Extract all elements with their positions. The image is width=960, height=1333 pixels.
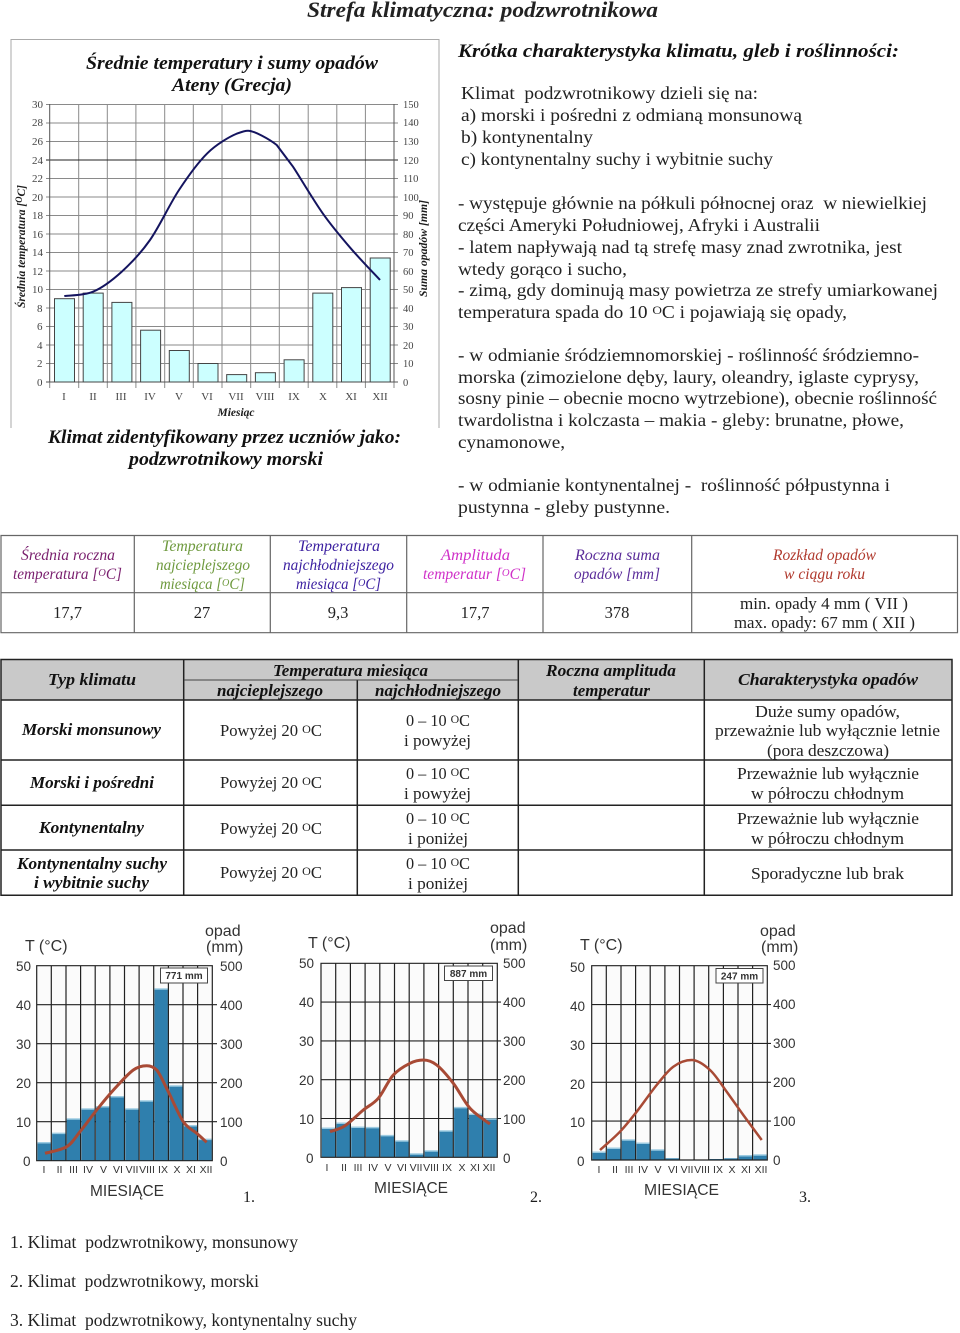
precipitation axis labels: 0 (773, 1153, 781, 1168)
precipitation axis labels: 100 (503, 1112, 526, 1127)
left axis title: O (14, 196, 24, 203)
temperature axis labels: 10 (16, 1115, 31, 1130)
temperature axis labels: 40 (299, 995, 314, 1010)
climate chart 3 (570, 923, 811, 1206)
warmest month column: O (302, 864, 311, 878)
precipitation axis labels: opad (490, 920, 526, 937)
right axis labels: 120 (403, 156, 419, 167)
table header background (1, 660, 952, 700)
warmest month column: Powyżej 20 (220, 863, 297, 882)
coldest month column: i powyżej (404, 784, 471, 803)
right axis labels: 70 (403, 248, 414, 259)
coldest month column: O (451, 810, 459, 824)
month labels: I (326, 1162, 328, 1174)
temperature axis labels: 0 (577, 1154, 585, 1169)
warmest month column: C (311, 863, 322, 882)
month labels (598, 1164, 767, 1176)
header: warmest month: Temperatura (162, 538, 243, 555)
precipitation min and max: max. opady: 67 mm ( XII ) (734, 613, 915, 632)
temperature axis labels (570, 937, 623, 1169)
annual total box: 771 mm (165, 971, 203, 982)
temperature axis labels (299, 935, 351, 1166)
precipitation axis labels (490, 920, 527, 1166)
temperature axis labels: 0 (23, 1154, 31, 1169)
month labels: VII (228, 391, 244, 403)
text block: continental variant: - w odmianie kontynentalnej - roślinność półpustynna i (458, 475, 890, 495)
heading: climate description: Krótka charakterystyka klimatu, gleb i roślinności: (457, 41, 899, 62)
left axis labels: 4 (37, 340, 43, 352)
header cells: najchłodniejszego (375, 681, 501, 700)
coldest month column: O (451, 855, 459, 869)
month labels: IV (638, 1164, 648, 1176)
month labels: VI (397, 1162, 407, 1174)
header: amplitude (423, 547, 526, 583)
left axis labels: 16 (32, 229, 44, 241)
month labels: I (43, 1164, 45, 1176)
annual total box: 887 mm (450, 969, 487, 980)
chart number: 3. (799, 1189, 811, 1206)
right axis labels: 80 (403, 230, 414, 241)
text block: occurrence and seasons: C i pojawiają się opady, (662, 302, 847, 322)
month labels: IV (368, 1162, 378, 1174)
header: coldest month: miesiąca [ (296, 576, 363, 593)
precipitation min and max (734, 594, 915, 632)
climate chart 2 (299, 920, 542, 1206)
precipitation axis labels: 500 (773, 958, 796, 973)
month labels: V (175, 391, 183, 403)
precipitation axis labels (205, 923, 243, 1169)
month labels: V (384, 1162, 392, 1174)
precipitation axis labels: 500 (503, 956, 526, 971)
coldest month column: C (459, 764, 470, 783)
right axis labels: 20 (403, 341, 414, 352)
climate type names: Kontynentalny (38, 818, 145, 837)
text block: climate subdivisions: a) morski i pośredni z odmianą monsunową (461, 105, 802, 125)
table: Athens climate data (1, 536, 958, 633)
climate type names: Kontynentalny suchy (16, 854, 168, 873)
text block: Mediterranean variant (458, 345, 937, 452)
right axis labels: 150 (403, 100, 419, 111)
precipitation characteristics column: Przeważnie lub wyłącznie (737, 764, 919, 783)
warmest month column: O (302, 820, 311, 834)
month labels: VIII (694, 1164, 710, 1176)
month labels: XI (186, 1164, 196, 1176)
temperature axis labels: 50 (16, 959, 31, 974)
left axis labels: 26 (32, 136, 44, 148)
climate type names: i wybitnie suchy (34, 873, 150, 892)
month labels: II (341, 1162, 347, 1174)
month labels (43, 1164, 212, 1176)
left axis labels: 12 (32, 266, 43, 278)
month labels: XI (741, 1164, 751, 1176)
month labels: IV (144, 391, 156, 403)
header cells: Roczna amplituda (545, 661, 676, 680)
panel: Athens climate chart (11, 40, 439, 428)
header: mean annual temperature (13, 545, 122, 583)
temperature axis labels: 40 (570, 999, 585, 1014)
precipitation axis labels: 400 (220, 998, 243, 1013)
x axis title: MIESIĄCE (90, 1183, 164, 1200)
values row: 17,7 (461, 603, 489, 622)
precipitation axis labels: 400 (503, 995, 526, 1010)
precipitation axis labels: 300 (503, 1034, 526, 1049)
text block: climate subdivisions: b) kontynentalny (461, 127, 593, 147)
legend: chart identification (10, 1232, 357, 1330)
annual total box (444, 966, 492, 980)
header: amplitude: C] (510, 566, 526, 583)
x axis title: MIESIĄCE (644, 1182, 719, 1199)
month labels: IX (713, 1164, 723, 1176)
text block: Mediterranean variant: cynamonowe, (458, 432, 565, 452)
header: annual precipitation (574, 547, 660, 583)
text block: occurrence and seasons: - występuje głównie na półkuli północnej oraz w niewielkiej (458, 193, 927, 213)
temperature axis labels: 50 (570, 960, 585, 975)
precipitation characteristics column (715, 702, 940, 883)
warmest month column: C (311, 721, 322, 740)
precipitation characteristics column: Przeważnie lub wyłącznie (737, 809, 919, 828)
header: coldest month (283, 538, 394, 593)
header: precipitation distribution: w ciągu roku (784, 566, 865, 583)
temperature curve (45, 1066, 207, 1153)
precipitation axis labels: opad (205, 923, 241, 940)
chart caption: Klimat zidentyfikowany przez uczniów jako: (47, 427, 401, 448)
right axis labels: 40 (403, 304, 414, 315)
temperature axis labels: 0 (306, 1151, 314, 1166)
temperature axis labels (16, 938, 68, 1169)
chart caption (47, 427, 401, 470)
precipitation characteristics column: Sporadyczne lub brak (751, 864, 905, 883)
precipitation axis labels: 300 (220, 1037, 243, 1052)
month labels: IX (442, 1162, 452, 1174)
left axis labels: 8 (37, 303, 43, 315)
temperature axis labels: 20 (570, 1077, 585, 1092)
text block: climate subdivisions: c) kontynentalny suchy i wybitnie suchy (461, 149, 773, 169)
precipitation bars (322, 1108, 497, 1157)
header cells (48, 661, 919, 700)
left axis labels (32, 99, 44, 389)
precipitation axis labels: (mm) (761, 939, 798, 956)
table: subtropical climate types (1, 660, 952, 895)
header cells: temperatur (573, 681, 651, 700)
text block: occurrence and seasons: O (652, 303, 662, 317)
precipitation characteristics column: w półroczu chłodnym (751, 784, 904, 803)
warmest month column: Powyżej 20 (220, 819, 297, 838)
month labels (62, 391, 388, 403)
header: warmest month: C] (229, 576, 245, 593)
x axis title: Miesiąc (216, 407, 255, 419)
text block: Mediterranean variant: morska (zimozielone dęby, laury, oleandry, iglaste cyprysy, (458, 367, 919, 387)
precipitation characteristics column: (pora deszczowa) (767, 741, 889, 760)
chart number: 1. (243, 1189, 255, 1206)
header: precipitation distribution (772, 547, 876, 583)
temperature axis labels: T (°C) (25, 938, 68, 955)
header: warmest month: miesiąca [ (160, 576, 227, 593)
text block: occurrence and seasons: części Ameryki Południowej, Afryki i Australii (458, 215, 820, 235)
header: mean annual temperature: C] (106, 566, 122, 583)
header cells: Charakterystyka opadów (738, 670, 919, 689)
precipitation characteristics column: w półroczu chłodnym (751, 829, 904, 848)
temperature axis labels: 40 (16, 998, 31, 1013)
temperature axis labels: 30 (16, 1037, 31, 1052)
precipitation characteristics column: przeważnie lub wyłącznie letnie (715, 721, 940, 740)
header: amplitude: Amplituda (440, 547, 510, 564)
header: mean annual temperature: O (98, 567, 106, 579)
coldest month column: i powyżej (404, 731, 471, 750)
header: precipitation distribution: Rozkład opadów (772, 547, 876, 564)
header: coldest month: Temperatura (298, 538, 380, 555)
month labels: XII (483, 1162, 495, 1174)
precipitation axis labels: opad (760, 923, 796, 940)
month labels: VIII (423, 1162, 439, 1174)
left axis labels: 14 (32, 247, 44, 259)
temperature axis labels: 20 (299, 1073, 314, 1088)
month labels: IX (288, 391, 300, 403)
values row: 27 (194, 603, 210, 622)
climate type names: Morski i pośredni (29, 773, 154, 792)
climate chart 1 (16, 923, 255, 1206)
right axis labels: 100 (403, 193, 419, 204)
annual total box (716, 968, 763, 983)
coldest month column: i poniżej (408, 829, 468, 848)
values row: 9,3 (328, 603, 348, 622)
month labels: X (458, 1162, 466, 1174)
warmest month column (220, 721, 322, 882)
warmest month column: O (302, 774, 311, 788)
left axis labels: 0 (37, 377, 43, 389)
header: amplitude: temperatur [ (423, 566, 504, 583)
right axis labels: 130 (403, 137, 419, 148)
left axis title: C] (14, 185, 28, 197)
values row (53, 603, 629, 622)
month labels: VIII (139, 1164, 155, 1176)
chart number: 2. (530, 1189, 542, 1206)
legend: chart identification: 3. Klimat podzwrotnikowy, kontynentalny suchy (10, 1310, 357, 1330)
header: annual precipitation: opadów [mm] (574, 566, 660, 583)
coldest month column: 0 – 10 (406, 809, 447, 828)
precipitation axis labels: 300 (773, 1036, 796, 1051)
right axis labels: 90 (403, 211, 414, 222)
text block: Mediterranean variant: twardolistna i kolczasta – makia - gleby: brunatne, płowe, (458, 410, 904, 430)
left axis labels: 24 (32, 155, 44, 167)
chart heading (86, 52, 378, 96)
left axis labels: 30 (32, 99, 44, 111)
warmest month column: C (311, 773, 322, 792)
month labels: VI (668, 1164, 678, 1176)
right axis labels (403, 100, 419, 389)
month labels: XI (345, 391, 357, 403)
month labels (326, 1162, 495, 1174)
warmest month column: Powyżej 20 (220, 773, 297, 792)
temperature axis labels: T (°C) (308, 935, 351, 952)
legend: chart identification: 1. Klimat podzwrotnikowy, monsunowy (10, 1232, 298, 1252)
annual total box: 247 mm (721, 972, 758, 982)
precipitation bars (54, 258, 390, 382)
annual total box (160, 968, 208, 983)
values row: 378 (605, 603, 629, 622)
month labels: III (625, 1164, 633, 1176)
month labels: I (598, 1164, 600, 1176)
coldest month column: C (459, 809, 470, 828)
text block: occurrence and seasons: - latem napływają nad tą strefę masy znad zwrotnika, jest (458, 237, 902, 257)
coldest month column (404, 711, 471, 893)
header: coldest month: C] (365, 576, 381, 593)
month labels: II (89, 391, 97, 403)
precipitation axis labels: 200 (220, 1076, 243, 1091)
month labels: IX (158, 1164, 168, 1176)
x axis title: MIESIĄCE (374, 1180, 448, 1197)
precipitation min and max: min. opady 4 mm ( VII ) (740, 594, 908, 613)
header: warmest month: najcieplejszego (156, 557, 250, 574)
coldest month column: O (451, 765, 459, 779)
precipitation bars (592, 1140, 767, 1160)
temperature axis labels: 30 (570, 1038, 585, 1053)
coldest month column: 0 – 10 (406, 764, 447, 783)
left axis labels: 20 (32, 192, 44, 204)
month labels: V (100, 1164, 107, 1176)
coldest month column: C (459, 854, 470, 873)
month labels: VI (113, 1164, 123, 1176)
month labels: III (354, 1162, 362, 1174)
warmest month column: Powyżej 20 (220, 721, 297, 740)
month labels: II (612, 1164, 618, 1176)
temperature axis labels: 50 (299, 956, 314, 971)
text block: continental variant: pustynna - gleby pustynne. (458, 497, 670, 517)
precipitation axis labels: (mm) (206, 939, 243, 956)
precipitation axis labels: 400 (773, 997, 796, 1012)
right axis labels: 110 (403, 174, 418, 185)
left axis title: Średnia temperatura [ (14, 199, 28, 308)
month labels: VIII (256, 391, 275, 403)
temperature axis labels: 10 (570, 1115, 585, 1130)
header: mean annual temperature: Średnia roczna (21, 545, 115, 564)
month labels: IV (83, 1164, 93, 1176)
chart heading: Średnie temperatury i sumy opadów (86, 52, 378, 74)
header: mean annual temperature: temperatura [ (13, 566, 102, 583)
text block: occurrence and seasons: - zimą, gdy dominują masy powietrza ze strefy umiarkowanej (458, 280, 938, 300)
month labels: XI (470, 1162, 480, 1174)
precipitation characteristics column: Duże sumy opadów, (755, 702, 900, 721)
coldest month column: 0 – 10 (406, 711, 447, 730)
header cells: Temperatura miesiąca (273, 661, 428, 680)
header: amplitude: O (502, 567, 510, 579)
climate type names (16, 720, 168, 892)
month labels: X (728, 1164, 736, 1176)
temperature axis labels: 30 (299, 1034, 314, 1049)
chart caption: podzwrotnikowy morski (127, 449, 324, 470)
warmest month column: C (311, 819, 322, 838)
text block: Mediterranean variant: - w odmianie śródziemnomorskiej - roślinność śródziemno- (458, 345, 919, 365)
month labels: I (62, 391, 66, 403)
month labels: X (173, 1164, 181, 1176)
text block: continental variant (458, 475, 890, 517)
header cells: Typ klimatu (48, 670, 136, 689)
text block: occurrence and seasons: wtedy gorąco i sucho, (458, 259, 627, 279)
text block: Mediterranean variant: sosny pinie – obecnie mocno wytrzebione), obecnie roślinność (458, 388, 937, 408)
month labels: III (69, 1164, 78, 1176)
temperature curve (330, 1060, 490, 1132)
header: coldest month: najchłodniejszego (283, 557, 394, 574)
right axis labels: 0 (403, 378, 408, 389)
header: annual precipitation: Roczna suma (574, 547, 660, 564)
header: warmest month: O (222, 577, 229, 589)
coldest month column: 0 – 10 (406, 854, 447, 873)
legend: chart identification: 2. Klimat podzwrotnikowy, morski (10, 1271, 259, 1291)
precipitation axis labels: 0 (220, 1154, 228, 1169)
coldest month column: C (459, 711, 470, 730)
temperature axis labels: T (°C) (580, 937, 623, 954)
left axis labels: 28 (32, 117, 44, 129)
month labels: XII (755, 1164, 767, 1176)
warmest month column: O (302, 722, 311, 736)
temperature axis labels: 20 (16, 1076, 31, 1091)
month labels: X (319, 391, 327, 403)
month labels: II (57, 1164, 62, 1176)
temperature axis labels: 10 (299, 1112, 314, 1127)
text block: occurrence and seasons (458, 193, 938, 322)
right axis labels: 50 (403, 285, 414, 296)
precipitation axis labels: 200 (503, 1073, 526, 1088)
right axis labels: 30 (403, 322, 414, 333)
month labels: XII (372, 391, 388, 403)
month labels: III (116, 391, 127, 403)
precipitation axis labels (760, 923, 798, 1168)
text block: occurrence and seasons: temperatura spada do 10 (458, 302, 630, 322)
header: warmest month (156, 538, 250, 593)
precipitation axis labels: 100 (773, 1114, 796, 1129)
temperature curve (600, 1060, 762, 1150)
precipitation axis labels: 0 (503, 1151, 511, 1166)
temperature curve (64, 131, 380, 296)
text block: climate subdivisions (461, 83, 802, 169)
right axis labels: 10 (403, 359, 414, 370)
precipitation axis labels: 500 (220, 959, 243, 974)
left axis labels: 10 (32, 284, 44, 296)
precipitation axis labels: 100 (220, 1115, 243, 1130)
header cells: najcieplejszego (217, 681, 323, 700)
right axis labels: 140 (403, 118, 419, 129)
precipitation axis labels: 200 (773, 1075, 796, 1090)
month labels: V (654, 1164, 662, 1176)
coldest month column: O (451, 712, 459, 726)
values row: 17,7 (53, 603, 82, 622)
month labels: VII (681, 1164, 693, 1176)
left axis labels: 2 (37, 358, 42, 370)
header: coldest month: O (358, 577, 365, 589)
right axis labels: 60 (403, 267, 414, 278)
left axis labels: 18 (32, 210, 44, 222)
month labels: XII (200, 1164, 212, 1176)
month labels: VII (126, 1164, 138, 1176)
text block: climate subdivisions: Klimat podzwrotnikowy dzieli się na: (461, 83, 758, 103)
precipitation axis labels: (mm) (490, 937, 527, 954)
climate type names: Morski monsunowy (21, 720, 162, 739)
left axis labels: 6 (37, 321, 43, 333)
right axis title: Suma opadów [mm] (416, 200, 430, 297)
coldest month column: i poniżej (408, 874, 468, 893)
chart heading: Ateny (Grecja) (171, 75, 292, 96)
month labels: VII (410, 1162, 422, 1174)
precipitation bars (38, 989, 212, 1161)
month labels: VI (201, 391, 213, 403)
left axis labels: 22 (32, 173, 43, 185)
